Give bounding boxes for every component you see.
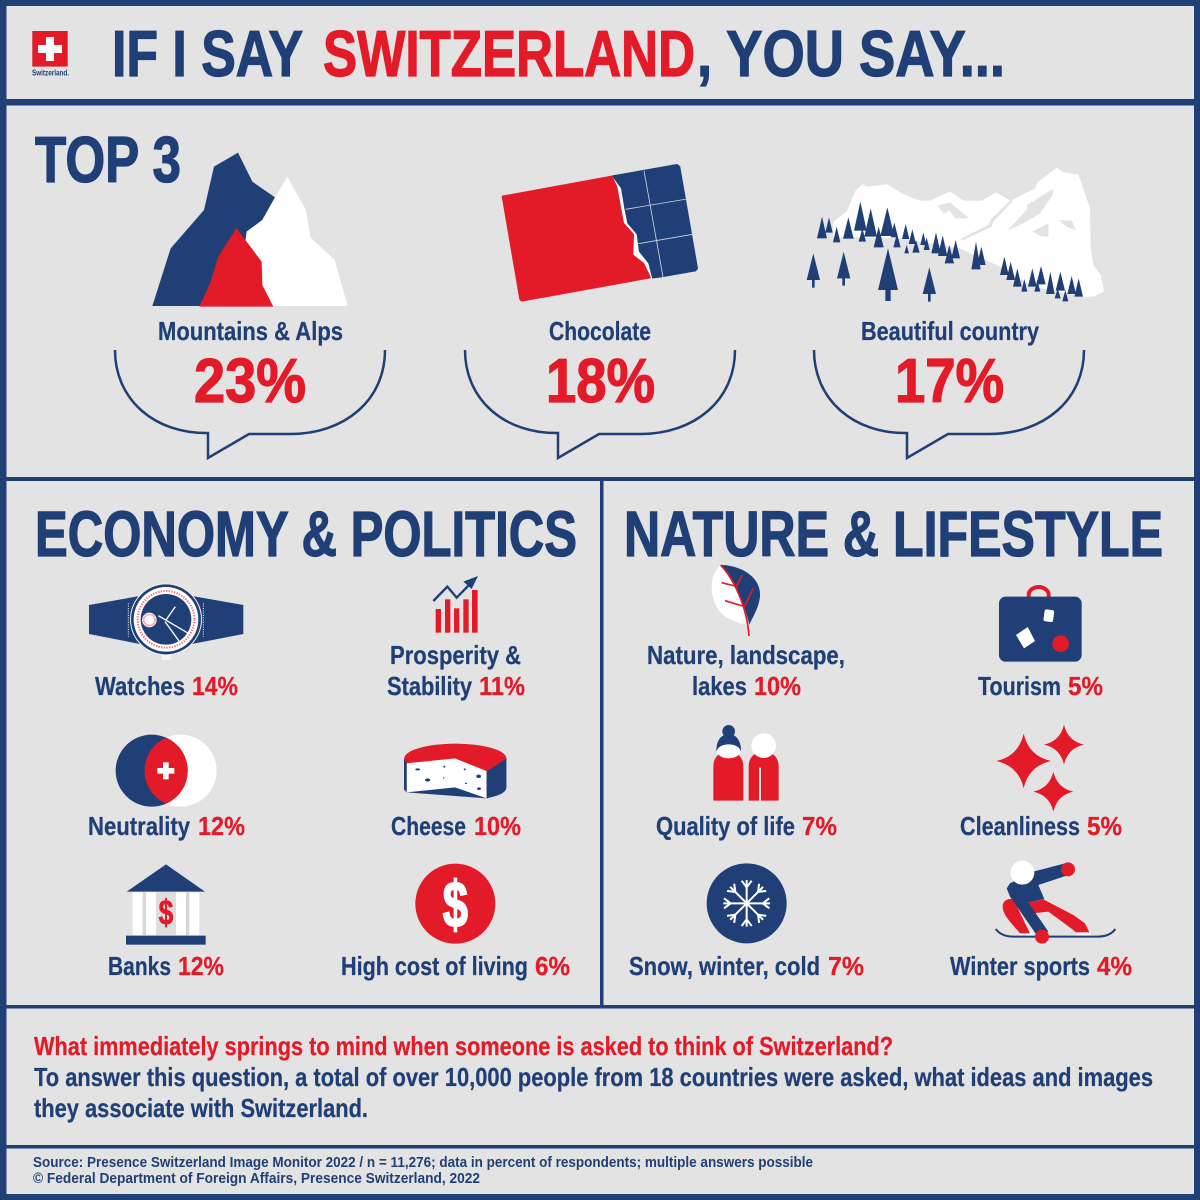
label: beautiful country: Beautiful country	[861, 316, 1039, 346]
icon: mountains	[152, 153, 348, 307]
icon: suitcase	[999, 587, 1082, 662]
logo: Switzerland: Switzerland.	[32, 68, 69, 78]
icon: snowy landscape with trees	[807, 168, 1104, 302]
label: banks: 12%	[178, 951, 224, 981]
label: chocolate: Chocolate	[549, 316, 651, 346]
source note: Source: Presence Switzerland Image Monitor 2022 / n = 11,276; data in percent of respondents; multiple answers possible	[33, 1154, 813, 1171]
label: snow, winter, cold: Snow, winter, cold	[629, 951, 820, 981]
icon: leaf	[712, 565, 760, 636]
icon: snowflake	[707, 863, 787, 943]
label: cleanliness: Cleanliness	[960, 811, 1080, 841]
icon: bank	[126, 864, 206, 945]
icon: sparkles	[996, 725, 1084, 812]
label: banks: Banks	[108, 951, 171, 981]
label: high cost of living: High cost of living	[341, 951, 528, 981]
label: winter sports: Winter sports	[950, 951, 1090, 981]
value: 23% in speech bubble: 23%	[194, 347, 306, 416]
label: high cost of living: 6%	[535, 951, 570, 981]
value: 18% in speech bubble: 18%	[546, 347, 655, 416]
icon: dollar coin: $	[443, 868, 468, 941]
label: prosperity and stability: Stability	[387, 671, 472, 701]
text block: survey question and description: they associate with Switzerland.	[34, 1093, 368, 1123]
icon: watch	[89, 583, 243, 660]
label: prosperity and stability: Prosperity &	[390, 640, 521, 670]
value: 23% in speech bubble	[115, 347, 385, 458]
label: cleanliness: 5%	[1087, 811, 1122, 841]
label: nature, landscape, lakes	[647, 640, 845, 701]
label: banks	[108, 951, 224, 981]
label: prosperity and stability: 11%	[479, 671, 525, 701]
title	[112, 17, 1005, 90]
label: tourism: Tourism	[978, 671, 1061, 701]
icon: people	[713, 725, 779, 801]
label: winter sports: 4%	[1097, 951, 1132, 981]
value: 18% in speech bubble	[465, 347, 735, 458]
label: watches: 14%	[192, 671, 238, 701]
icon: bank: $	[159, 894, 173, 933]
title: , YOU SAY...	[697, 17, 1005, 90]
icon: prosperity chart	[433, 576, 478, 633]
value: 17% in speech bubble	[814, 347, 1084, 458]
icon: snowboarder	[996, 861, 1115, 944]
icon: neutrality circles	[116, 735, 217, 807]
label: mountains and alps: Mountains & Alps	[158, 316, 343, 346]
icon: cheese	[404, 744, 506, 798]
heading: economy and politics: ECONOMY & POLITICS	[35, 498, 577, 570]
label: quality of life: 7%	[802, 811, 837, 841]
label: cheese: Cheese	[391, 811, 466, 841]
logo: Switzerland	[32, 31, 69, 78]
text block: survey question and description	[34, 1031, 1153, 1123]
label: neutrality: Neutrality	[88, 811, 190, 841]
label: nature, landscape, lakes: Nature, landscape,	[647, 640, 845, 670]
heading: top 3: TOP 3	[35, 123, 181, 196]
icon: dollar coin	[415, 864, 495, 944]
label: prosperity and stability	[387, 640, 525, 701]
label: tourism: 5%	[1068, 671, 1103, 701]
icon: chocolate bar	[502, 165, 697, 301]
label: quality of life: Quality of life	[656, 811, 795, 841]
value: 17% in speech bubble: 17%	[895, 347, 1004, 416]
label: nature, landscape, lakes: 10%	[754, 671, 801, 701]
label: cheese: 10%	[474, 811, 521, 841]
title: IF I SAY	[112, 17, 303, 90]
title: SWITZERLAND	[323, 17, 695, 90]
label: snow, winter, cold: 7%	[828, 951, 864, 981]
text block: survey question and description: What immediately springs to mind when someone is asked to think of Switzerland?	[34, 1031, 893, 1061]
label: nature, landscape, lakes: lakes	[692, 671, 747, 701]
label: neutrality: 12%	[198, 811, 245, 841]
source note: © Federal Department of Foreign Affairs, Presence Switzerland, 2022	[33, 1170, 480, 1187]
label: watches: Watches	[95, 671, 185, 701]
source note	[33, 1154, 813, 1187]
